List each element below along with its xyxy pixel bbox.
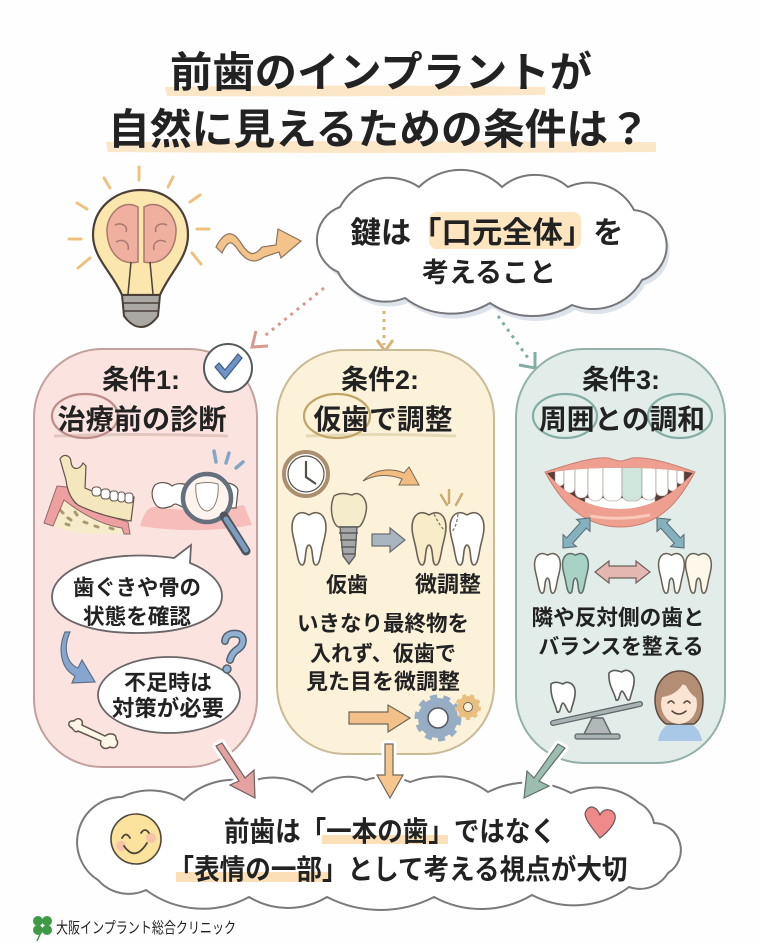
icon: smiling woman: [655, 671, 703, 741]
icon: jaw bone: [44, 455, 134, 534]
label: fine adjustment: 微調整: [415, 572, 481, 597]
panel: condition 2: [277, 350, 494, 754]
heading: condition 2: 条件2:: [341, 365, 419, 395]
title: 前歯のインプラントが: [170, 49, 592, 96]
text block: conclusion: 前歯は「一本の歯」ではなく: [224, 816, 556, 847]
text block: conclusion: [168, 816, 628, 885]
arrow: dotted to condition 3: [498, 316, 535, 368]
text block: condition 3: バランスを整える: [538, 635, 704, 659]
cloud: key message: [317, 170, 670, 321]
cloud: conclusion: [77, 777, 681, 910]
heading: condition 1: 治療前の診断: [58, 404, 226, 435]
speech bubble: check gums and bone: [52, 545, 222, 633]
title: 自然に見えるための条件は？: [108, 106, 650, 153]
highlight: key phrases: [176, 835, 448, 882]
logo: clinic: 大阪インプラント総合クリニック: [56, 919, 236, 937]
panel: condition 3: [516, 349, 725, 763]
speech bubble: check gums and bone: 歯ぐきや骨の: [73, 576, 201, 600]
arrow: wavy arrow to cloud: [216, 229, 301, 261]
logo: clinic: [33, 916, 236, 941]
arrow: dotted to condition 1: [252, 288, 324, 347]
icon: adjusted teeth: [412, 490, 484, 565]
speech bubble: check gums and bone: 状態を確認: [83, 605, 191, 629]
arrow: orange to gears: [349, 705, 410, 732]
arrow: grey: [372, 528, 405, 552]
icon: gears: [417, 696, 480, 739]
cloud: key message: 考えること: [422, 258, 556, 288]
heading: condition 3: [533, 365, 712, 438]
icon: smile: [545, 458, 695, 527]
icon: heart: [585, 807, 615, 838]
text block: condition 3: 隣や反対側の歯と: [532, 606, 704, 630]
arrow: orange to conclusion: [377, 744, 403, 798]
panel: condition 1: [34, 344, 257, 767]
icon: clock: [284, 452, 328, 496]
speech bubble: countermeasures: [98, 657, 240, 733]
icon: mismatched teeth: [535, 554, 588, 593]
icon: question mark: [223, 634, 243, 673]
arrow: double teal right: [657, 518, 684, 548]
arrow: curved orange: [363, 467, 419, 485]
arrow: dotted to condition 2: [377, 311, 393, 351]
icon: bone: [69, 719, 118, 748]
text block: condition 2: 見た目を微調整: [306, 670, 460, 694]
heading: condition 1: [52, 365, 228, 438]
text block: condition 2: 入れず、仮歯で: [310, 642, 456, 666]
icon: smiling face: [111, 814, 161, 864]
heading: condition 3: 周囲との調和: [539, 404, 705, 435]
icon: balance scale with teeth: [551, 670, 640, 739]
heading: condition 2: [304, 365, 456, 438]
arrow: pink to conclusion: [216, 743, 255, 798]
speech bubble: countermeasures: 不足時は: [124, 671, 212, 695]
label: temporary tooth: 仮歯: [326, 574, 368, 597]
icon: natural tooth: [292, 513, 326, 565]
arrow: double pink: [595, 561, 650, 583]
heading: condition 2: 仮歯で調整: [314, 404, 452, 435]
icon: magnifying glass over teeth: [140, 451, 252, 551]
title: [106, 49, 656, 153]
cloud: key message: 鍵は「口元全体」を: [350, 217, 624, 250]
heading: condition 3: 条件3:: [582, 365, 660, 395]
arrow: curved blue: [61, 632, 95, 683]
icon: implant: [331, 493, 366, 564]
text block: conclusion: 「表情の一部」として考える視点が大切: [168, 853, 628, 885]
heading: condition 1: 条件1:: [102, 365, 180, 395]
icon: check mark: [204, 344, 252, 392]
icon: light bulb with brain: [69, 167, 209, 327]
speech bubble: countermeasures: 対策が必要: [112, 696, 224, 721]
icon: clover: [33, 916, 52, 941]
icon: matched teeth: [659, 554, 711, 593]
text block: condition 2: いきなり最終物を: [297, 612, 469, 636]
arrow: double teal left: [563, 518, 590, 548]
text block: condition 3: [532, 606, 704, 659]
arrow: green to conclusion: [524, 744, 565, 798]
text block: condition 2: [297, 612, 469, 694]
